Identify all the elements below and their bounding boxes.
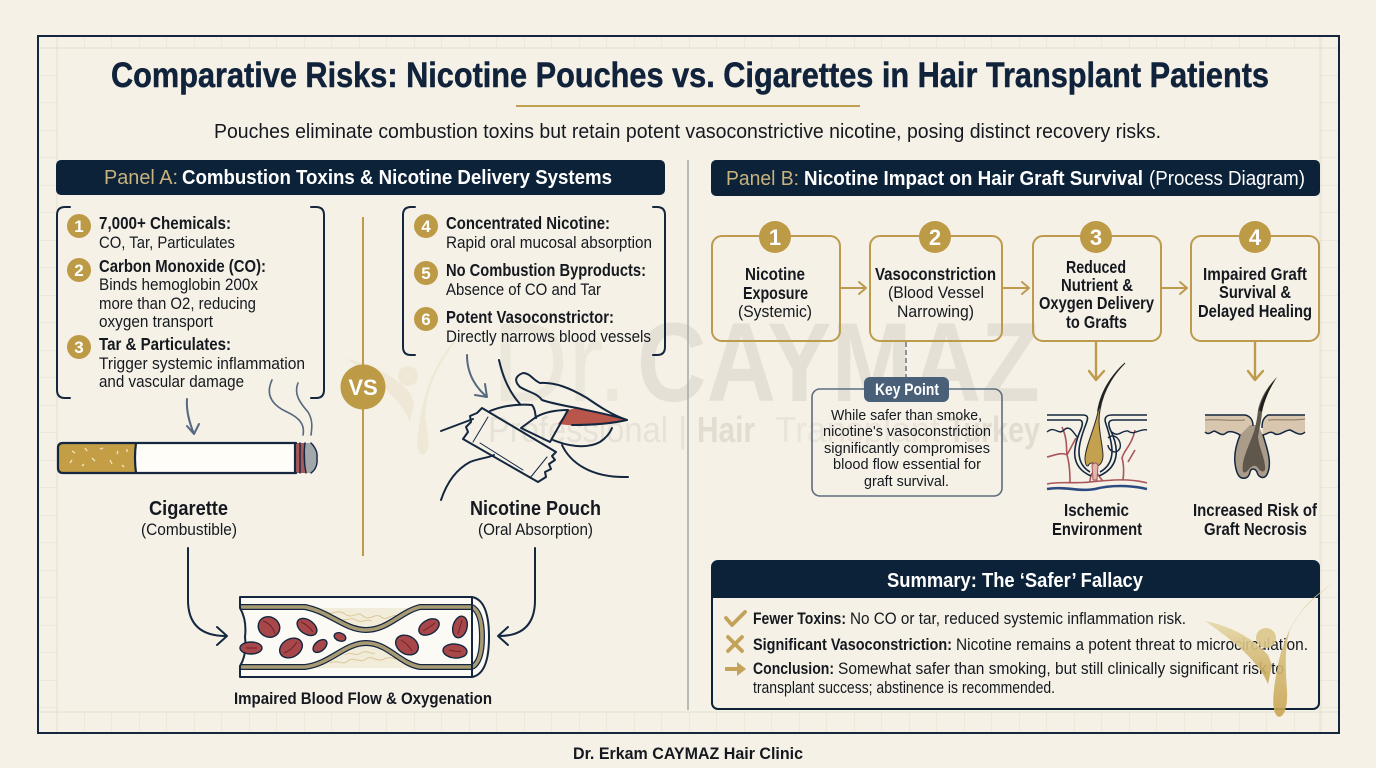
panel: cigarette risk list: 3 [74, 338, 84, 357]
row: vasoconstriction: Significant Vasoconstriction: [753, 636, 952, 654]
panel: cigarette risk list: 1 [74, 217, 84, 236]
panel: cigarette risk list: Tar & Particulates: [99, 334, 231, 354]
panel: cigarette risk list [57, 207, 324, 398]
panel A header: Panel A: [104, 167, 178, 189]
caption: blood flow: Impaired Blood Flow & Oxygenation [234, 689, 492, 708]
label: graft necrosis: Graft Necrosis [1204, 519, 1307, 539]
callout: key point: Key Point [875, 381, 939, 399]
watermark: faint logo [347, 321, 475, 455]
label: ischemic environment: Ischemic [1064, 500, 1129, 520]
step 3: to Grafts [1066, 312, 1127, 332]
step 2: Narrowing) [897, 303, 974, 321]
step 4: 4 [1249, 225, 1262, 250]
row: conclusion: Conclusion: [753, 660, 834, 678]
smoke [269, 380, 312, 435]
step 1 [712, 221, 840, 341]
row: vasoconstriction [753, 636, 1308, 654]
callout: key point: graft survival. [864, 473, 949, 490]
panel: cigarette risk list: CO, Tar, Particulates [99, 234, 235, 252]
panel: nicotine pouch list: Potent Vasoconstrictor: [446, 307, 614, 327]
row: fewer toxins: No CO or tar, reduced systemic inflammation risk. [850, 610, 1186, 628]
subtitle: Pouches eliminate combustion toxins but retain potent vasoconstrictive nicotine, posing distinct recovery risks. [214, 121, 1161, 143]
panel: cigarette risk list: Binds hemoglobin 200x [99, 276, 259, 294]
watermark: Dr. CAYMAZ: Hair [697, 409, 755, 450]
step 3 [1033, 221, 1161, 341]
watermark: Dr. CAYMAZ: Turkey [948, 409, 1040, 450]
icon: cigarette [58, 443, 317, 473]
panel: nicotine pouch list: Absence of CO and Tar [446, 281, 601, 299]
step 3: 3 [1090, 225, 1102, 250]
panel: nicotine pouch list: 6 [421, 310, 431, 329]
callout: key point: significantly compromises [824, 440, 990, 457]
label: nicotine pouch: Nicotine Pouch [470, 498, 601, 520]
icon: check [726, 612, 745, 625]
row: vasoconstriction: Nicotine remains a potent threat to microcirculation. [956, 636, 1308, 654]
panel: cigarette risk list: Trigger systemic inflammation [99, 355, 305, 373]
panel: summary [712, 561, 1319, 709]
summary heading: Summary: The ‘Safer’ Fallacy [887, 570, 1144, 592]
step 4: Survival & [1219, 282, 1291, 302]
watermark: Dr. CAYMAZ [488, 300, 1040, 450]
icon: ischemic follicle [1047, 363, 1147, 490]
VS divider [340, 217, 386, 556]
arrow: step 3 down [1089, 342, 1104, 380]
panel: cigarette risk list: and vascular damage [99, 373, 244, 391]
panel: cigarette risk list: 2 [74, 261, 84, 280]
arrow: step 1 to 2 [841, 282, 866, 294]
arrow: pouch to vessel [498, 548, 535, 645]
footer: Dr. Erkam CAYMAZ Hair Clinic [573, 744, 803, 763]
panel B header [711, 160, 1320, 196]
label: cigarette: (Combustible) [141, 521, 237, 539]
panel: cigarette risk list: Carbon Monoxide (CO): [99, 256, 266, 276]
step 4: Impaired Graft [1203, 264, 1307, 284]
label: cigarette: Cigarette [149, 498, 228, 520]
icon: nicotine pouch at mouth [441, 360, 628, 500]
callout: key point [812, 377, 1002, 496]
icon: necrotic follicle [1205, 377, 1305, 478]
step 2: Vasoconstriction [875, 264, 996, 284]
panel: nicotine pouch list: 4 [421, 217, 431, 236]
panel: cigarette risk list: more than O2, reducing [99, 295, 256, 313]
watermark: Dr. CAYMAZ: Professional [488, 409, 668, 450]
arrow: cigarette to vessel [188, 548, 227, 645]
row: conclusion: Somewhat safer than smoking, but still clinically significant risk to [838, 660, 1284, 678]
panel: cigarette risk list: 7,000+ Chemicals: [99, 213, 231, 233]
row: conclusion: transplant success; abstinence is recommended. [753, 679, 1055, 697]
panel B header: (Process Diagram) [1149, 168, 1305, 190]
step 1: 1 [769, 225, 781, 250]
step 3: Nutrient & [1061, 275, 1133, 295]
arrow: list to cigarette [187, 399, 199, 434]
icon: arrow [725, 662, 746, 676]
label: nicotine pouch: (Oral Absorption) [478, 521, 593, 539]
arrow: step 4 down [1248, 342, 1263, 380]
label: graft necrosis: Increased Risk of [1193, 500, 1317, 520]
watermark: Dr. CAYMAZ: Transplant [775, 409, 940, 450]
label: graft necrosis [1193, 500, 1317, 539]
panel: cigarette risk list: oxygen transport [99, 313, 213, 331]
panel A header [56, 160, 665, 195]
step 1: (Systemic) [738, 303, 812, 321]
step 4 [1191, 221, 1319, 341]
panel: nicotine pouch list: Directly narrows blood vessels [446, 328, 651, 346]
arrow: step 2 to 3 [1003, 282, 1029, 294]
icon: narrowed blood vessel [240, 597, 489, 677]
arrow: list to pouch [467, 355, 487, 397]
step 2: 2 [929, 225, 941, 250]
callout: key point: blood flow essential for [833, 456, 981, 473]
panel: nicotine pouch list: 5 [421, 264, 431, 283]
step 3: Reduced [1066, 257, 1126, 277]
watermark: Dr. CAYMAZ: CAYMAZ [637, 300, 1040, 425]
row: conclusion [753, 660, 1284, 697]
VS divider: VS [348, 375, 378, 400]
step 1: Nicotine [745, 264, 805, 284]
panel: nicotine pouch list [403, 207, 665, 355]
label: cigarette [141, 498, 237, 539]
step 1: Exposure [743, 283, 808, 303]
step 2: (Blood Vessel [888, 284, 984, 302]
callout: key point: nicotine's vasoconstriction [823, 423, 991, 440]
arrow: step 3 to 4 [1162, 282, 1187, 294]
row: fewer toxins: Fewer Toxins: [753, 610, 846, 628]
step 3: Oxygen Delivery [1039, 293, 1154, 313]
title underline [516, 105, 860, 107]
label: nicotine pouch [470, 498, 601, 539]
watermark: Dr. CAYMAZ: | [678, 409, 687, 450]
panel: nicotine pouch list: No Combustion Byproducts: [446, 260, 646, 280]
callout: key point: While safer than smoke, [831, 407, 982, 424]
icon: cross [728, 637, 742, 651]
panel B header: Panel B: [726, 168, 799, 190]
watermark: Dr. CAYMAZ: Dr. [492, 300, 627, 425]
label: ischemic environment [1052, 500, 1142, 539]
panel A header: Combustion Toxins & Nicotine Delivery Systems [182, 167, 612, 189]
panel: nicotine pouch list: Rapid oral mucosal absorption [446, 234, 652, 252]
panel B header: Nicotine Impact on Hair Graft Survival [804, 168, 1143, 190]
step 2 [870, 221, 1002, 341]
logo: gold watermark [1205, 583, 1334, 717]
panel: nicotine pouch list: Concentrated Nicotine: [446, 213, 610, 233]
label: ischemic environment: Environment [1052, 519, 1142, 539]
step 4: Delayed Healing [1198, 301, 1312, 321]
